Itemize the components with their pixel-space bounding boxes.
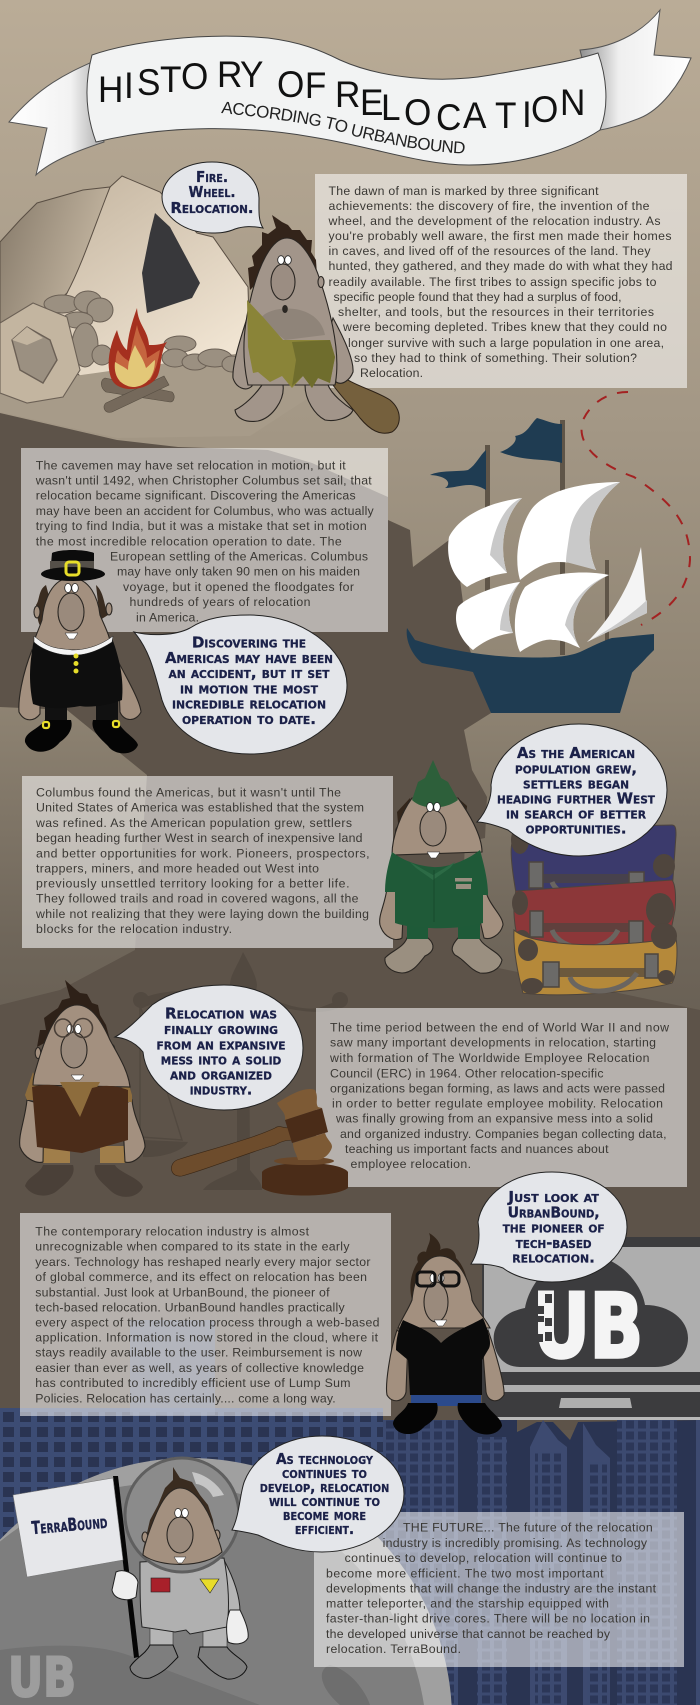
hat — [41, 550, 105, 581]
text panel: United States: United States of America was established that the system — [36, 801, 364, 815]
bubble: technology continues: become more — [283, 1506, 366, 1524]
bubble: UrbanBound: Just look at — [507, 1188, 599, 1206]
peaked tower — [530, 1420, 567, 1705]
text panel: dawn of man: achievements: the discovery of fire, the invention of the — [328, 199, 650, 213]
navy backdrop — [383, 1420, 700, 1705]
flag: TerraBound — [31, 1512, 108, 1539]
red badge — [151, 1578, 170, 1592]
legs — [45, 700, 118, 724]
shoe buckles — [43, 721, 119, 728]
bubble: technology continues: continues to — [282, 1464, 367, 1482]
text panel: dawn of man: so they had to think of something. Their solution? — [354, 351, 637, 365]
text panel: contemporary relocation: easier than ever as well, as years of collective knowledge — [35, 1361, 364, 1375]
eyes — [427, 802, 440, 812]
nose — [61, 1032, 87, 1068]
text panel: World War II: The time period between the end of World War II and now — [330, 1021, 669, 1035]
cave left lobe — [0, 187, 110, 335]
text panel: dawn of man: The dawn of man is marked by three significant — [328, 184, 599, 198]
zipper — [433, 870, 435, 922]
peaked tower right windows — [587, 1462, 607, 1705]
blue suitcase — [511, 825, 676, 900]
bubble: fire wheel relocation — [162, 162, 263, 233]
bubble: technology continues: develop, relocation — [260, 1478, 389, 1496]
arms — [19, 650, 141, 720]
trousers — [407, 920, 428, 939]
head and shoulders — [33, 578, 112, 650]
cloud — [494, 1255, 688, 1367]
tooth — [71, 1075, 84, 1080]
logs — [101, 376, 174, 412]
feet — [385, 935, 502, 973]
text panel: the future: faster-than-light drive cores. There will be no location in — [326, 1612, 650, 1626]
character: caveman — [233, 215, 399, 433]
text panel: Columbus: in America. — [136, 610, 199, 624]
bubble: finally growing: and organized — [170, 1065, 272, 1083]
head — [143, 1488, 222, 1564]
sleeves — [25, 1072, 132, 1102]
head — [398, 1256, 490, 1328]
text panel: World War II: teaching us important facts and nuances about — [345, 1142, 609, 1156]
collar — [410, 862, 455, 880]
text panel: Columbus: the most incredible relocation operation to date. The — [36, 534, 342, 548]
text panel: dawn of man: readily available. The first tribes to assign specific jobs to — [328, 275, 657, 289]
keyboard strip — [500, 1385, 700, 1392]
hull — [407, 628, 654, 713]
laptop with cloud logo — [482, 1237, 700, 1420]
text panel: Columbus: The cavemen may have set relocation in motion, but it — [36, 458, 346, 472]
section 2: Columbus ship — [407, 392, 690, 713]
stone wheel — [0, 303, 80, 403]
bubble: UrbanBound: relocation. — [512, 1249, 595, 1267]
black shirt — [396, 1318, 490, 1395]
title text: OF — [277, 63, 326, 106]
title text: HISTORY — [98, 53, 263, 110]
ears — [396, 823, 474, 837]
club — [333, 372, 399, 433]
bubble: technology continues: efficient. — [295, 1520, 354, 1538]
text panel: contemporary relocation: tech-based relocation. UrbanBound handles practically — [35, 1300, 345, 1314]
hair — [410, 1233, 468, 1305]
text panel: World War II: Council (ERC) in 1964. Other relocation-specific — [330, 1066, 604, 1080]
tooth — [427, 852, 440, 858]
character: pilgrim — [19, 550, 141, 753]
hair — [397, 798, 467, 830]
hair — [248, 215, 317, 290]
masts — [485, 420, 609, 655]
peaked tower right — [583, 1423, 610, 1705]
black coat — [30, 638, 123, 708]
text panel: dawn of man: wheel, and the development of the relocation industry. As — [328, 214, 660, 228]
text panel: Columbus: voyage, but it opened the floodgates for — [123, 580, 354, 594]
hat — [412, 760, 458, 808]
eyes — [67, 1024, 81, 1034]
text panel: dawn of man: longer survive with such a large population in one area, — [348, 336, 664, 350]
text panel: contemporary relocation — [20, 1213, 391, 1416]
feet — [235, 385, 353, 421]
arms — [233, 318, 353, 389]
text panel: contemporary relocation: of global commerce, and its effect on relocation has been — [35, 1270, 367, 1284]
banner left tail — [9, 62, 104, 175]
text panel: United States: They followed trails and road in covered wagons, all the — [36, 892, 359, 906]
text panel: Columbus: trying to find India, but it was a mistake that set in motion — [36, 519, 367, 533]
bubble: American population grew: opportunities. — [526, 819, 626, 837]
bubble: discovering the Americas — [134, 615, 347, 754]
eyes — [175, 1508, 188, 1518]
jeans — [411, 1390, 481, 1406]
tall block — [617, 1420, 677, 1705]
bubble: technology continues — [232, 1436, 404, 1552]
text panel: dawn of man: hunted, they gathered, and they made do with what they had — [328, 259, 673, 273]
bubble: fire wheel relocation: Relocation. — [170, 199, 254, 217]
text panel: Columbus: may have been an accident for Columbus, who was actually — [36, 504, 375, 518]
text panel: dawn of man — [315, 174, 687, 388]
text panel: dawn of man: shelter, and tools, but the resources in their territories — [338, 305, 654, 319]
chest — [260, 309, 325, 340]
text panel: Columbus: hundreds of years of relocation — [130, 595, 311, 609]
banner title — [8, 8, 692, 176]
gloves — [112, 1571, 248, 1644]
bubble: discovering the Americas: in motion the most — [180, 680, 318, 698]
text panel: the future: the developed universe that cannot be reached by — [326, 1627, 611, 1641]
bubble: finally growing: industry. — [190, 1080, 252, 1098]
head — [392, 798, 482, 855]
text panel: dawn of man: in caves, and lived off of the resources of the land. They — [328, 244, 651, 258]
ear — [318, 276, 324, 288]
text panel: United States: was refined. As the American population grew, settlers — [35, 816, 352, 830]
yellow suitcase — [514, 923, 677, 995]
bubble: American population grew: population grew, — [515, 759, 637, 777]
mouth — [282, 305, 288, 313]
text panel: the future: THE FUTURE... The future of the relocation — [403, 1521, 653, 1535]
text panel: contemporary relocation: has contributed to incredibly efficient use of Lump Sum — [35, 1376, 351, 1390]
bubble: discovering the Americas: an accident, but it set — [168, 664, 330, 682]
hair — [37, 980, 110, 1047]
glasses — [417, 1272, 459, 1286]
eyes — [65, 584, 78, 592]
bubble: technology continues: As technology — [276, 1450, 374, 1468]
flag pole — [113, 1476, 139, 1658]
text panel: United States: previously unsettled territory looking for a better life. — [36, 877, 350, 891]
text panel: United States: began heading further West in search of inexpensive land — [36, 831, 363, 845]
vest — [32, 1085, 128, 1153]
fire — [109, 308, 167, 389]
cave opening — [142, 213, 200, 313]
dashed voyage path — [581, 392, 690, 625]
character: hipster — [387, 1233, 504, 1434]
shoes — [25, 720, 138, 753]
gavel base — [262, 1163, 348, 1196]
bubble: finally growing — [115, 985, 303, 1110]
hair — [143, 1467, 215, 1550]
bubble: UrbanBound: UrbanBound, — [508, 1203, 600, 1221]
character: astronaut — [13, 1458, 248, 1679]
bubble: technology continues: will continue to — [269, 1492, 380, 1510]
bubble: American population grew: heading further West — [497, 789, 655, 807]
text panel: Columbus: relocation became significant. Discovering the Americas — [36, 489, 356, 503]
text panel: the future: developments that will change the industry are the instant — [326, 1581, 657, 1595]
tower block — [383, 1420, 458, 1705]
yellow badge — [200, 1579, 219, 1593]
text panel: World War II — [316, 1008, 687, 1187]
tooth — [434, 1320, 447, 1326]
nose — [424, 1282, 448, 1322]
skyline — [0, 1320, 700, 1705]
eyes — [430, 1274, 444, 1282]
text panel: World War II: in order to better regulate employee mobility. Relocation — [332, 1097, 663, 1111]
suit — [140, 1558, 228, 1634]
text panel: contemporary relocation: substantial. Just look at UrbanBound, the pioneer of — [35, 1285, 330, 1299]
pale tower behind panel — [130, 1320, 215, 1415]
ears — [142, 1530, 220, 1542]
hands — [380, 888, 503, 939]
bubble: UrbanBound — [471, 1172, 627, 1282]
gavel — [171, 1089, 348, 1196]
text panel: the future — [314, 1512, 684, 1667]
shirt — [60, 1082, 100, 1118]
peaked tower windows — [535, 1452, 561, 1705]
tooth — [174, 1557, 186, 1563]
text panel: contemporary relocation: unrecognizable when compared to its state in the early — [35, 1240, 350, 1254]
bubble: discovering the Americas: Discovering the — [192, 634, 306, 652]
buttons — [74, 654, 78, 674]
sails — [448, 482, 647, 652]
text panel: contemporary relocation: Policies. Relocation has certainly.... come a long way. — [35, 1391, 336, 1405]
bubble: discovering the Americas: operation to date. — [182, 710, 316, 728]
bubble: American population grew: As the American — [517, 744, 635, 762]
text panel: the future: become more efficient. The two most important — [326, 1566, 604, 1580]
bubble: American population grew — [477, 724, 667, 856]
UB logo: UB — [533, 1275, 643, 1378]
text panel: Columbus: European settling of the Americas. Columbus — [110, 550, 368, 564]
text panel: the future: relocation. TerraBound. — [326, 1642, 461, 1656]
shorts — [43, 1146, 125, 1163]
text panel: World War II: was finally growing from an expansive mess into a solid — [335, 1112, 653, 1126]
text panel: United States: while not realizing that they were laying down the building — [35, 907, 369, 921]
bubble: finally growing: mess into a solid — [161, 1050, 281, 1068]
text panel: contemporary relocation: stays readily available to the user. Reimbursement is now — [35, 1346, 362, 1360]
bubble: American population grew: in search of better — [506, 805, 647, 823]
helmet — [125, 1458, 239, 1572]
banner right tail — [580, 10, 691, 130]
moon — [0, 1458, 452, 1705]
ears — [34, 603, 112, 618]
legs — [150, 1626, 227, 1648]
text panel: United States — [22, 776, 393, 948]
title text: RELOCATION — [335, 73, 585, 138]
text panel: Columbus — [21, 448, 388, 632]
pocket — [455, 878, 472, 889]
ears — [35, 1044, 115, 1058]
tower — [477, 1437, 507, 1705]
bubble: finally growing: from an expansive — [156, 1035, 286, 1053]
text panel: dawn of man: were becoming depleted. Tribes knew that they could no — [342, 320, 667, 334]
trackpad — [559, 1398, 632, 1408]
bubble: American population grew: settlers began — [523, 775, 629, 793]
red suitcase — [512, 880, 676, 948]
banner front — [87, 36, 606, 165]
text panel: dawn of man: specific people found that they had a surplus of food, — [334, 290, 622, 304]
title text — [98, 53, 585, 138]
flags — [430, 418, 562, 490]
tooth — [65, 633, 78, 639]
suitcases — [511, 825, 677, 995]
text panel: the future: industry is incredibly promising. As technology — [383, 1536, 648, 1550]
hair — [36, 585, 108, 628]
text panel: contemporary relocation: The contemporary relocation industry is almost — [35, 1225, 310, 1239]
nose — [58, 593, 84, 631]
text panel: United States: trappers, miners, and more headed out West into — [36, 861, 319, 875]
nose — [271, 264, 295, 300]
glasses — [54, 1018, 92, 1038]
right arm — [220, 1560, 240, 1612]
map silhouette of the Americas — [0, 413, 700, 1430]
bubble: finally growing: Relocation was — [165, 1004, 277, 1022]
character: vest man — [20, 980, 145, 1197]
banner title: ACCORDING TO URBANBOUND — [221, 102, 465, 154]
text panel: World War II: organizations began forming, as laws and acts were passed — [330, 1081, 665, 1095]
text panel: contemporary relocation: years. Technology has reshaped nearly every major sector — [35, 1255, 371, 1269]
text panel: World War II: with formation of The Worldwide Employee Relocation — [329, 1051, 650, 1065]
arms — [387, 1330, 504, 1401]
gavel head — [277, 1089, 332, 1160]
section 1: cave scene — [0, 162, 687, 438]
bubble: fire wheel relocation: Fire. — [196, 168, 228, 186]
head — [33, 1005, 130, 1087]
text panel: World War II: and organized industry. Companies began collecting data, — [340, 1127, 666, 1141]
bubble: discovering the Americas: Americas may have been — [165, 649, 333, 667]
bubble: UrbanBound: tech-based — [516, 1234, 592, 1252]
text panel: contemporary relocation: every aspect of the relocation process through a web-based — [35, 1316, 380, 1330]
shoes — [393, 1403, 502, 1434]
boots — [130, 1645, 247, 1679]
bubble: finally growing: finally growing — [164, 1020, 278, 1038]
text panel: World War II: saw many important developments in relocation, starting — [330, 1036, 656, 1050]
flag — [13, 1478, 123, 1577]
nose — [167, 1517, 193, 1553]
text panel: the future: continues to develop, relocation will continue to — [345, 1551, 622, 1565]
nose — [420, 810, 446, 846]
eyes — [278, 256, 291, 264]
laptop body — [482, 1237, 700, 1417]
text panel: the future: matter teleporter, and the starship equipped with — [326, 1597, 609, 1611]
bubble: fire wheel relocation: Wheel. — [188, 183, 236, 201]
left city block — [0, 1408, 383, 1705]
body — [244, 238, 337, 385]
bubble: discovering the Americas: incredible relocation — [172, 695, 326, 713]
text panel: World War II: employee relocation. — [350, 1157, 471, 1171]
fur tunic — [247, 300, 335, 388]
green uniform — [385, 850, 488, 928]
text panel: dawn of man: Relocation. — [360, 366, 423, 380]
text panel: dawn of man: you're probably well aware, the first men made their homes — [328, 229, 672, 243]
cave right lobe — [40, 176, 250, 376]
white collar — [34, 636, 113, 655]
arms — [20, 1100, 145, 1162]
text panel: contemporary relocation: application. Information is now stored in the cloud, where it — [35, 1331, 379, 1345]
text panel: Columbus: wasn't until 1492, when Christopher Columbus set sail, that — [35, 473, 372, 487]
bubble: UrbanBound: the pioneer of — [503, 1219, 605, 1237]
subtitle text — [221, 113, 470, 154]
helmet glint — [192, 1472, 224, 1497]
ground — [0, 352, 330, 438]
screen — [484, 1247, 700, 1372]
text panel: United States: blocks for the relocation industry. — [36, 922, 232, 936]
text panel: United States: Columbus found the Americas, but it wasn't until The — [36, 786, 341, 800]
scales of justice silhouette — [133, 952, 348, 1190]
rocks — [44, 291, 242, 372]
feet — [25, 1165, 143, 1197]
character: settler — [380, 760, 503, 973]
text panel: Columbus: may have only taken 90 men on his maiden — [117, 565, 360, 579]
gavel handle — [171, 1127, 294, 1176]
text panel: United States: and better opportunities for work. Pioneers, prospectors, — [36, 846, 370, 860]
